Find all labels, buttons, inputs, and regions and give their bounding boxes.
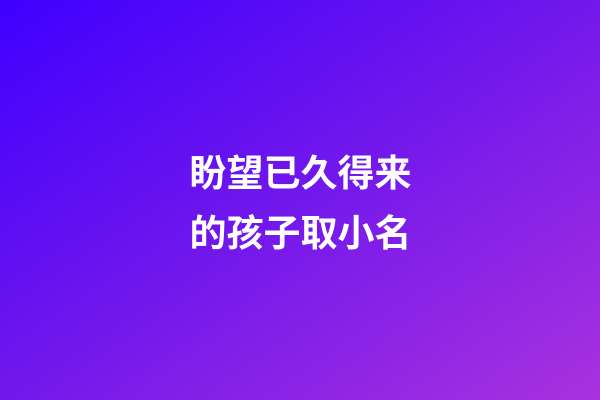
title bbox=[190, 152, 412, 254]
title: 盼望已久得来 bbox=[190, 152, 412, 194]
title: 的孩子取小名 bbox=[190, 212, 412, 254]
